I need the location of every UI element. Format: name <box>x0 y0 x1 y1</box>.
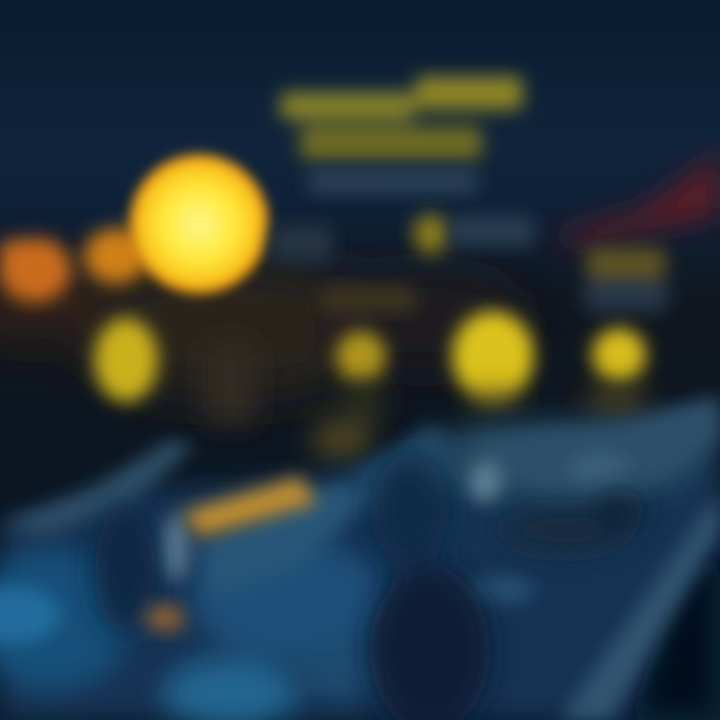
small yellow dot with label <box>413 214 534 254</box>
orange band at left <box>0 228 148 302</box>
yellow circle 2 <box>336 331 386 383</box>
blue peaks and highlights <box>0 395 720 643</box>
blue landscape base <box>0 410 720 720</box>
title: blurred yellow heading <box>280 76 523 160</box>
yellow circle 4 <box>592 328 646 382</box>
red trend line at right <box>550 150 720 245</box>
yellow circle 1 <box>94 318 158 402</box>
subtitle: blurred grey text <box>308 168 478 194</box>
middle label <box>320 286 416 312</box>
yellow circle 3 <box>452 311 534 401</box>
right column labels <box>584 248 668 312</box>
warm glow behind the middle band <box>0 260 530 400</box>
diagonal light ridge at lower right <box>560 490 720 720</box>
label near sun <box>272 225 332 261</box>
orange-yellow highlight bar <box>182 476 318 537</box>
dark hollows in landscape <box>95 455 720 720</box>
large sun <box>129 154 269 294</box>
faint labels below circles <box>205 340 646 460</box>
small orange accent <box>145 604 185 632</box>
